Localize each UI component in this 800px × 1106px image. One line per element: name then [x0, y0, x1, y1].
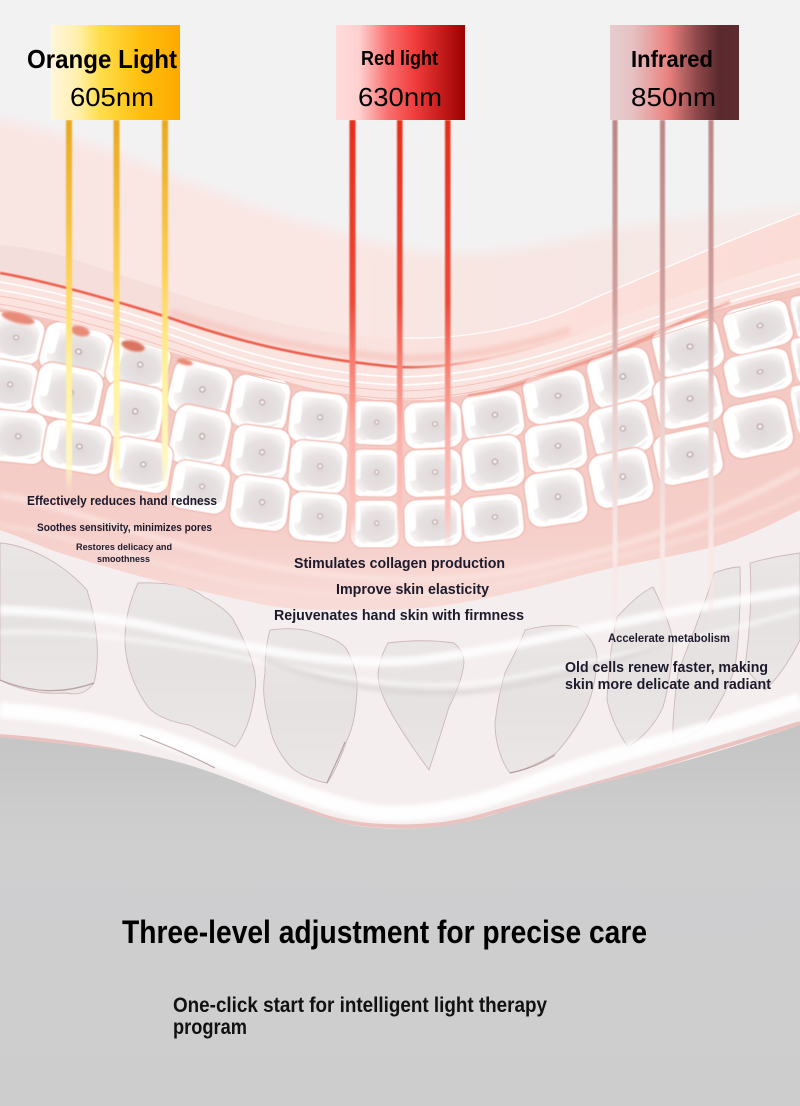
upper skin surface [0, 112, 800, 430]
label: orange light: 605nm [70, 82, 154, 112]
heading: Three-level adjustment for precise care [122, 914, 647, 950]
dark strand accents [0, 680, 555, 783]
subheading: program [173, 1016, 247, 1039]
dermis layer: pink band [0, 282, 800, 610]
red light beams [350, 120, 450, 552]
skin cross-section [0, 112, 800, 829]
epidermal cells: three rows [0, 292, 800, 548]
infrared light beams [612, 120, 714, 640]
orange light beams [66, 120, 168, 495]
infrared benefits [565, 633, 771, 693]
infrared benefits: skin more delicate and radiant [565, 676, 771, 693]
red accents above cells [0, 302, 730, 396]
orange light benefits: Effectively reduces hand redness [27, 493, 217, 508]
soft shading above red line [170, 312, 570, 358]
label: infrared: Infrared [631, 46, 713, 72]
orange light benefits: Restores delicacy and [76, 542, 172, 553]
orange light benefits [27, 493, 217, 565]
label: red light: Red light [361, 48, 438, 70]
stratified layer above cells [0, 258, 800, 400]
orange light benefits: smoothness [97, 554, 150, 565]
subheading [173, 994, 547, 1039]
white waves behind network [0, 590, 800, 685]
label: orange light [27, 25, 180, 120]
pale stripes in dermis [0, 470, 800, 595]
label: infrared [610, 25, 739, 120]
label: infrared: 850nm [631, 82, 716, 112]
subcutaneous layer: collagen network [0, 542, 800, 829]
network voids [0, 543, 800, 783]
lower skin surface [0, 213, 800, 367]
label: red light: 630nm [358, 82, 442, 112]
red light benefits: Stimulates collagen production [294, 555, 505, 572]
orange light benefits: Soothes sensitivity, minimizes pores [37, 522, 212, 534]
background: upper light [0, 0, 800, 740]
infrared benefits: Old cells renew faster, making [565, 659, 768, 676]
label: red light [336, 25, 465, 120]
grey shadow band in network [265, 640, 680, 693]
red light benefits: Rejuvenates hand skin with firmness [274, 607, 524, 624]
label: orange light: Orange Light [27, 44, 177, 74]
subheading: One-click start for intelligent light therapy [173, 994, 547, 1017]
infrared benefits: Accelerate metabolism [608, 633, 730, 645]
red boundary line [0, 273, 600, 367]
lower rim of network [0, 700, 800, 826]
background: lower grey [0, 700, 800, 1106]
red light benefits: Improve skin elasticity [336, 581, 490, 598]
red light benefits [274, 555, 524, 624]
highlight line on surface [400, 213, 800, 338]
